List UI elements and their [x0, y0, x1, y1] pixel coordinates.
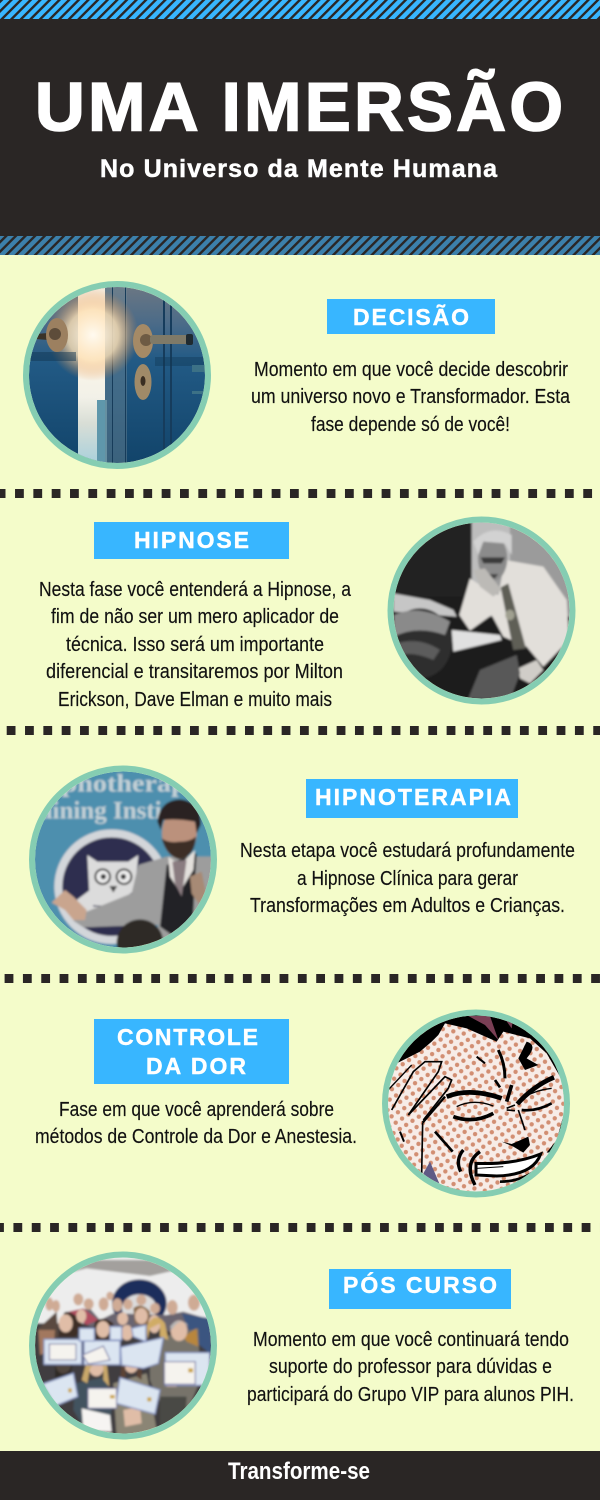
- text: hipnose: [39, 579, 352, 711]
- banner: decisão: [327, 299, 495, 334]
- banner: controle da dor: [94, 1019, 289, 1084]
- banner: decisão: DECISÃO: [353, 303, 469, 330]
- text: pós curso: suporte do professor para dúvidas e: [269, 1356, 552, 1378]
- text: controle da dor: [35, 1099, 357, 1148]
- text: hipnoterapia: Transformações em Adultos e Crianças.: [250, 895, 565, 917]
- banner: pós curso: PÓS CURSO: [343, 1271, 497, 1298]
- photo: seated man in black and white: [387, 517, 577, 707]
- text: hipnoterapia: [240, 840, 575, 917]
- photo: speaker on stage: pnotherap: [62, 770, 187, 798]
- panel: hipnoterapia: [30, 767, 575, 966]
- text: pós curso: [247, 1329, 574, 1406]
- text: decisão: [251, 359, 571, 436]
- illustration: comic face in pain: [380, 1007, 577, 1200]
- title: UMA IMERSÃO: [35, 68, 563, 146]
- text: hipnose: diferencial e transitaremos por Milton: [46, 661, 343, 683]
- photo: speaker on stage: aining Insti: [40, 796, 162, 824]
- text: hipnose: Erickson, Dave Elman e muito mais: [58, 689, 332, 711]
- text: controle da dor: Fase em que você aprenderá sobre: [59, 1099, 334, 1121]
- panel: controle da dor: [35, 1007, 577, 1200]
- banner: hipnoterapia: HIPNOTERAPIA: [315, 784, 511, 810]
- panel: hipnose: [39, 517, 577, 711]
- subtitle: No Universo da Mente Humana: [100, 155, 498, 183]
- text: controle da dor: métodos de Controle da Dor e Anestesia.: [35, 1126, 357, 1148]
- photo: group with certificates: [30, 1253, 220, 1443]
- banner: hipnose: [94, 522, 289, 559]
- banner: pós curso: [329, 1269, 511, 1309]
- text: hipnose: Nesta fase você entenderá a Hipnose, a: [39, 579, 352, 601]
- panel: pós curso: [30, 1253, 574, 1443]
- banner: controle da dor: DA DOR: [146, 1053, 246, 1079]
- text: hipnoterapia: a Hipnose Clínica para gerar: [297, 868, 518, 890]
- banner: hipnose: HIPNOSE: [134, 527, 249, 553]
- text: hipnose: técnica. Isso será um importante: [66, 634, 324, 656]
- banner: controle da dor: CONTROLE: [117, 1024, 258, 1050]
- photo: speaker on stage: [30, 767, 220, 966]
- text: decisão: Momento em que você decide descobrir: [254, 359, 568, 381]
- banner: hipnoterapia: [306, 779, 518, 818]
- text: decisão: fase depende só de você!: [311, 414, 510, 436]
- text: hipnose: fim de não ser um mero aplicador de: [51, 606, 339, 628]
- footer: Transforme-se: [228, 1458, 370, 1485]
- photo: door opening to light: [25, 283, 209, 467]
- footer: [0, 1451, 600, 1500]
- header band: [0, 0, 600, 255]
- panel: decisão: [25, 283, 571, 467]
